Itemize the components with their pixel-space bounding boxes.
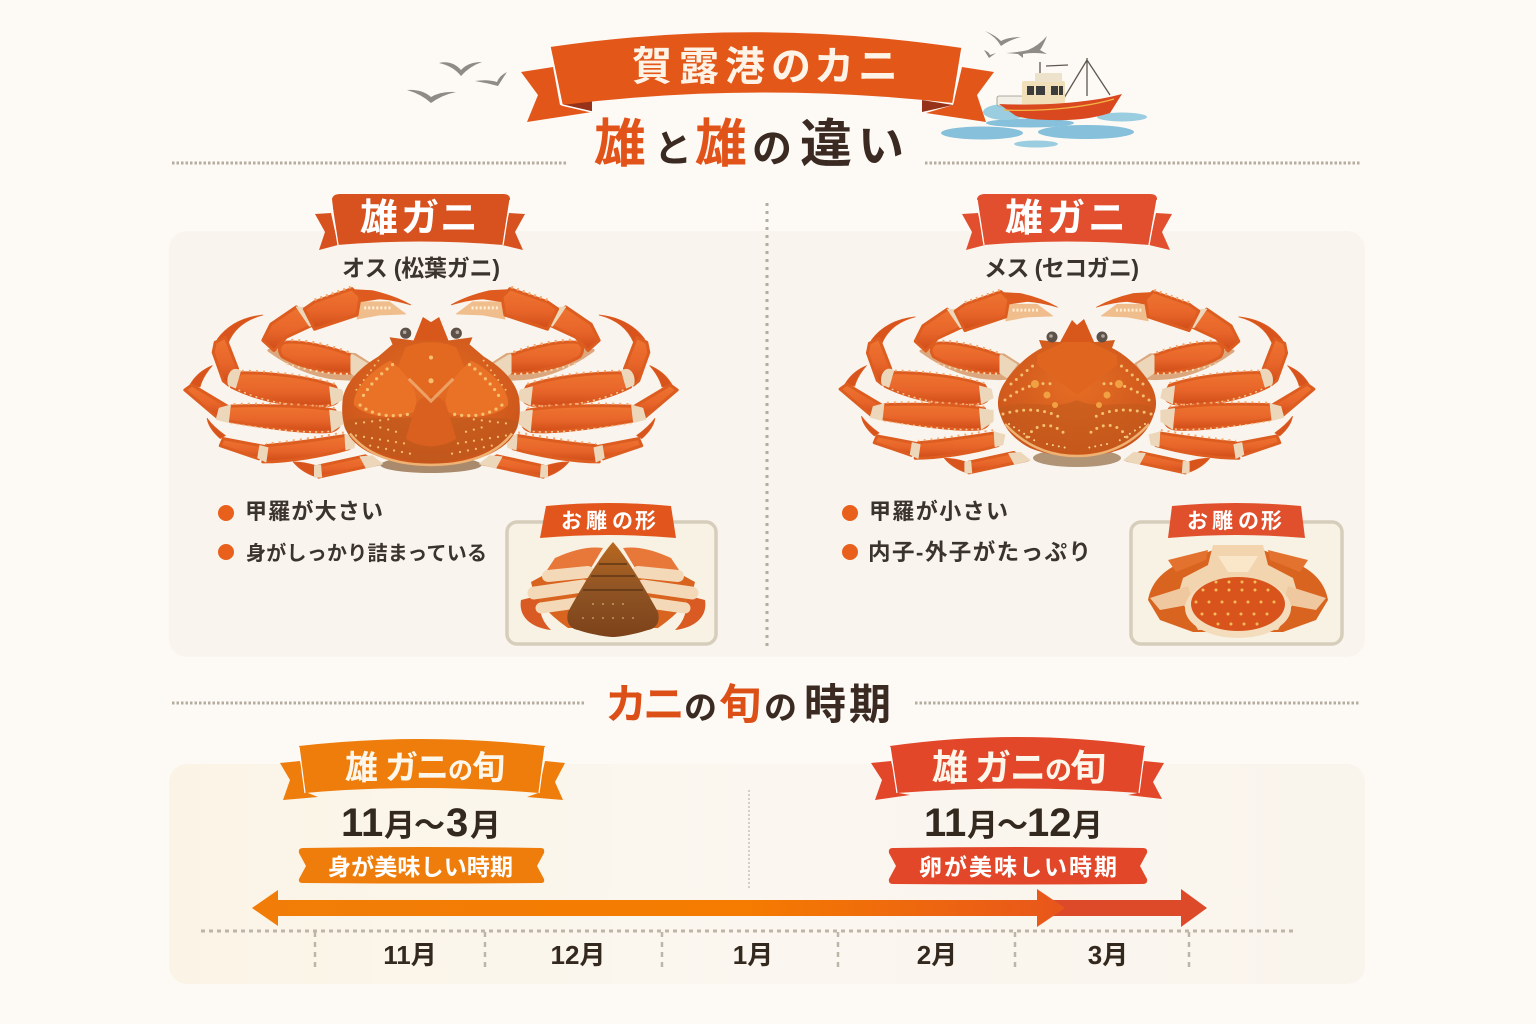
month labels: 12月	[551, 940, 605, 970]
ribbon: male season: の	[448, 757, 473, 785]
title ribbon	[521, 32, 994, 122]
ribbon: male season: ニ	[416, 749, 449, 786]
divider	[172, 163, 1360, 703]
illustration: female crab	[840, 290, 1314, 473]
ribbon: female season: ガ	[975, 747, 1011, 788]
female subtitle: メス (セコガニ)	[984, 255, 1139, 281]
illustration: female belly	[1148, 545, 1328, 638]
pill: female: 卵が美味しい時期	[919, 854, 1117, 880]
label: belly shape: お雕の形	[561, 510, 656, 533]
ribbon: male season: 旬	[472, 749, 505, 786]
label: belly shape	[1168, 503, 1305, 538]
panel: season	[169, 764, 1365, 984]
season: female	[871, 737, 1164, 884]
date range: female: ～	[997, 808, 1028, 843]
bullet points: female: 内子-外子がたっぷり	[868, 539, 1091, 565]
month labels: 11月	[383, 940, 437, 970]
ribbon: male	[315, 194, 525, 250]
month labels: 3月	[1088, 940, 1128, 970]
subtitle: difference: と	[654, 129, 692, 171]
panel: crab comparison	[169, 231, 1365, 657]
ribbon: male season: ガ	[385, 749, 418, 786]
illustration: male belly	[521, 542, 705, 637]
subtitle: difference: 雄	[594, 116, 646, 174]
subtitle: difference: の	[752, 127, 792, 171]
section divider vertical	[766, 203, 768, 650]
ribbon: female season	[871, 737, 1164, 800]
bullet points: male	[218, 499, 487, 565]
divider: season centre	[748, 790, 750, 888]
ribbon: female	[962, 194, 1172, 250]
date range: female: 月	[1072, 808, 1103, 843]
heading: season: の	[764, 689, 797, 726]
header birds right	[984, 31, 1047, 58]
subtitle: difference: 雄	[695, 116, 747, 174]
ribbon: female season: 雄	[932, 747, 968, 788]
bullet points: female	[842, 499, 1091, 565]
ribbon: female season: ニ	[1010, 747, 1046, 788]
month labels: 2月	[917, 940, 957, 970]
heading: season: 時	[804, 681, 846, 728]
arrow: male season	[252, 889, 1065, 927]
season: male	[280, 739, 565, 884]
date range: male: 月	[384, 808, 415, 843]
inset: female belly	[1131, 503, 1342, 644]
heading: season: 期	[849, 681, 891, 728]
timeline	[201, 931, 1297, 970]
illustration: male crab	[185, 287, 677, 477]
ribbon: female: 雄ガニ	[1005, 198, 1126, 240]
label: belly shape	[540, 503, 676, 538]
inset: male belly	[507, 503, 716, 644]
heading: season: カ	[605, 681, 647, 728]
date range: male: 11	[341, 801, 383, 845]
panel: male crab	[185, 194, 716, 644]
month labels	[383, 940, 1128, 970]
date range: female: 11	[924, 801, 966, 845]
subtitle: difference: い	[858, 120, 904, 172]
heading: season: ニ	[643, 681, 685, 728]
ribbon: female season: の	[1045, 756, 1072, 786]
header birds left	[407, 62, 507, 103]
date range: male: 月	[470, 808, 501, 843]
date range: female: 月	[967, 808, 998, 843]
month labels: 1月	[733, 940, 773, 970]
ribbon: male: 雄ガニ	[360, 198, 478, 240]
male subtitle: オス (松葉ガニ)	[342, 255, 500, 281]
bullet points: male: 甲羅が大さい	[245, 499, 383, 524]
pill: male: 身が美味しい時期	[328, 854, 513, 880]
ribbon: male season	[280, 739, 565, 800]
panel: female crab	[840, 194, 1342, 644]
pill: male	[299, 847, 544, 884]
bullet points: male: 身がしっかり詰まっている	[246, 541, 487, 565]
ribbon: male season: 雄	[345, 749, 378, 786]
date range: male: 3	[446, 801, 468, 845]
date range: male: ～	[414, 808, 445, 843]
heading: season: の	[684, 689, 717, 726]
bullet points: female: 甲羅が小さい	[869, 499, 1008, 524]
label: belly shape: お雕の形	[1187, 510, 1282, 533]
arrow: female season	[1040, 889, 1207, 927]
date range: female: 12	[1027, 801, 1072, 845]
pill: female	[889, 847, 1147, 884]
subtitle: difference: 違	[800, 116, 852, 174]
heading: season: 旬	[719, 681, 761, 728]
title text: 賀露港のカニ	[632, 45, 898, 89]
icon: fishing boat	[941, 58, 1147, 148]
ribbon: female season: 旬	[1070, 747, 1106, 788]
